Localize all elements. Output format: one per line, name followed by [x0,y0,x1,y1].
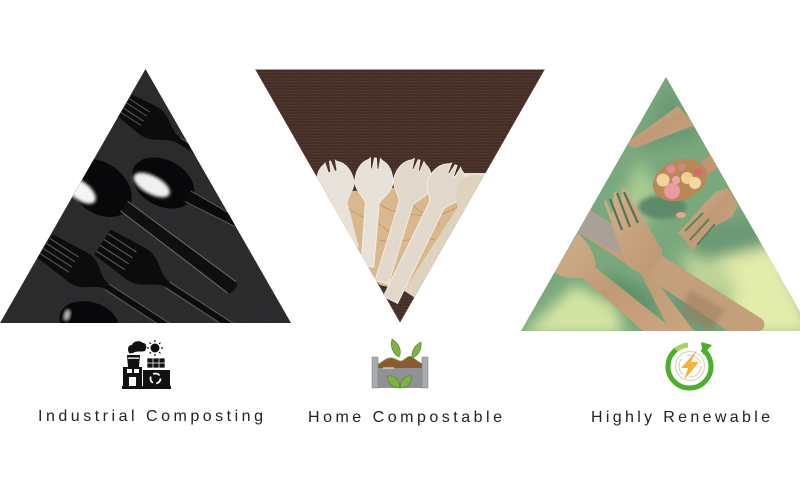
spork 1 [316,160,359,248]
top leaves [391,339,400,357]
bamboo spoon, lower left [555,233,672,335]
panel: brown linen and palm-leaf sporks triangle [255,69,545,323]
bamboo spoon with food [638,151,720,219]
bamboo knife, top [628,106,695,148]
spork 2 [354,157,394,268]
cooling tower [127,355,140,367]
label: Home Compostable: Home Compostable [308,409,502,426]
black spoon, bottom [60,301,118,323]
black spoon, right [131,158,236,228]
panel: black plastic cutlery triangle [0,69,291,323]
icon: renewable energy arrow with lightning bolt [668,342,712,388]
recycling arrows [150,374,160,384]
bamboo fork, right [678,188,738,250]
icon: factory, solar panel and recycling [122,340,171,389]
spork 4 [384,162,466,304]
icon: compost bin with leaves [372,339,428,388]
label: Industrial Composting: Industrial Composting [38,408,263,425]
black fork, left [38,234,170,323]
ground line [122,386,171,389]
infographic canvas [0,69,800,426]
bin posts [372,357,378,388]
cloud of smoke [128,341,146,353]
factory block [123,367,142,388]
palm leaf plate behind sporks [342,184,480,292]
bin body [377,368,423,388]
crumb [676,212,686,218]
label: Highly Renewable: Highly Renewable [591,409,770,426]
bottom leaves [387,376,400,388]
solar panel [147,358,165,368]
spork 3 [375,158,432,285]
black fork, top [118,94,194,154]
panel: bamboo cutlery on green triangle [521,77,800,335]
bamboo knife, crossing [578,210,764,331]
dappled light and shade [521,80,800,335]
sun [147,340,163,356]
spork 5 [404,175,484,298]
soil mound [377,356,423,369]
bamboo fork, large centre [604,188,697,335]
black fork, centre [94,230,234,323]
black spoon, left with long handle [72,159,237,294]
recycling box [143,370,170,388]
